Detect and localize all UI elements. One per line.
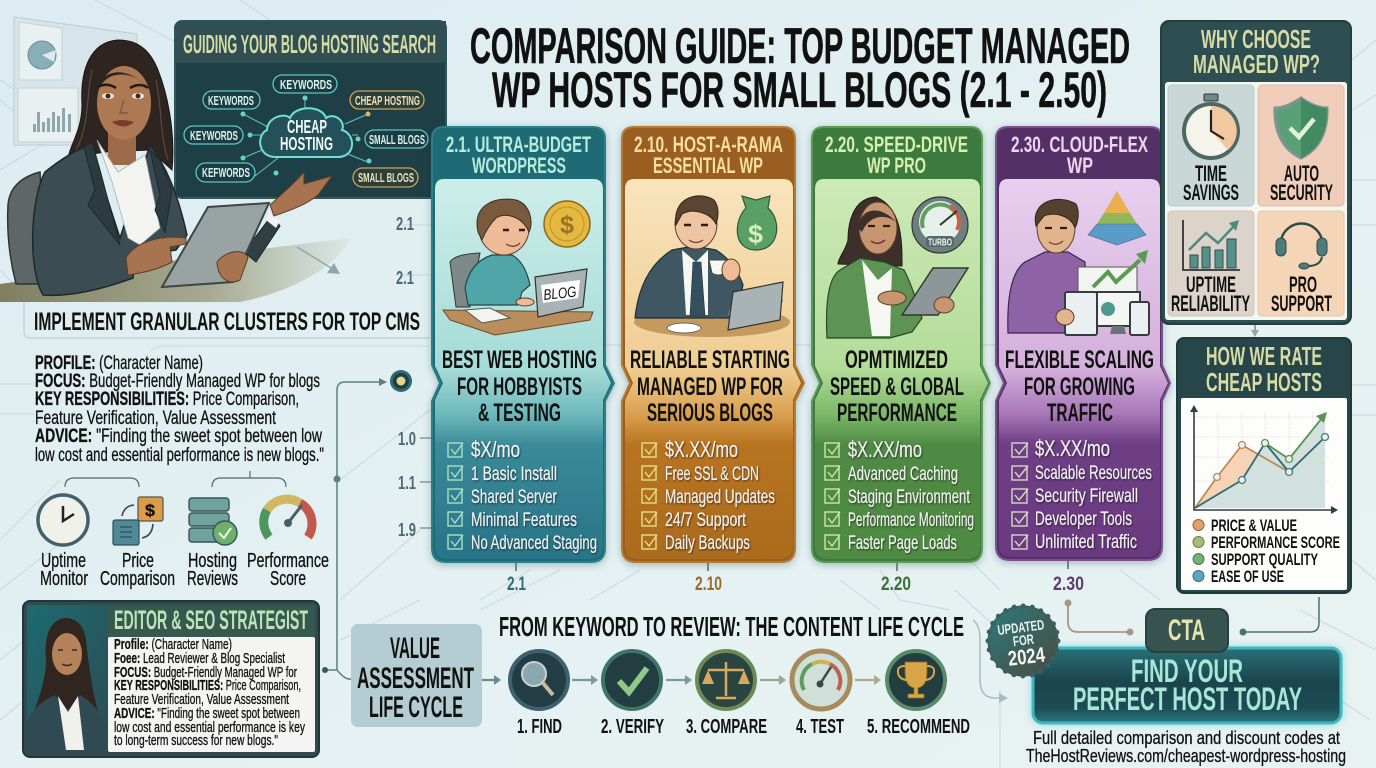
card subtitle: RELIABLE STARTING: [630, 346, 790, 374]
card title: WORDPRESS: [472, 153, 566, 178]
text block: profile: ADVICE: "Finding the sweet spot between low: [35, 426, 322, 447]
value assessment life cycle box: LIFE CYCLE: [369, 691, 463, 724]
value assessment life cycle box: ASSESSMENT: [357, 662, 474, 695]
text block: editor details: FOCUS: Budget-Friendly Managed WP for: [114, 665, 297, 681]
icon: price comparison: $: [145, 501, 156, 520]
feature list: Shared Server: [471, 487, 557, 508]
step: recommend: [867, 651, 970, 738]
icon: uptime monitor: Monitor: [40, 568, 88, 590]
badge: updated for 2024: 2024: [1007, 643, 1047, 671]
step: find: [510, 651, 568, 738]
keyword network diagram: KEYWORDS: [208, 93, 254, 108]
feature list: Performance Monitoring: [848, 510, 974, 531]
keyword network diagram: KEYWORDS: [280, 77, 332, 92]
icon: price comparison: Comparison: [100, 568, 175, 590]
text block: editor details: to long-term success for new blogs.": [114, 733, 278, 749]
tile: auto security: AUTO: [1284, 161, 1319, 186]
illustration: presenter with tablet: [0, 40, 350, 302]
feature list: Advanced Caching: [848, 464, 958, 485]
card version labels: 2.10: [695, 574, 722, 595]
tile: uptime reliability: RELIABILITY: [1171, 291, 1250, 316]
axis tick labels: 2.1: [396, 268, 414, 288]
card title: ESSENTIAL WP: [653, 153, 763, 178]
feature list: [642, 437, 775, 554]
text block: profile: PROFILE: (Character Name): [35, 353, 203, 374]
feature list: $X/mo: [471, 437, 520, 462]
feature list: Staging Environment: [848, 487, 970, 508]
feature list: Minimal Features: [471, 510, 577, 531]
arrow: why to how: [1251, 325, 1259, 337]
connectors to CTA: [973, 597, 1319, 703]
card subtitle: BEST WEB HOSTING: [442, 346, 597, 374]
icon: uptime monitor: Uptime: [41, 550, 86, 572]
card subtitle: SERIOUS BLOGS: [647, 399, 773, 427]
illustration: boy at laptop with coin: [443, 199, 593, 335]
card subtitle: & TESTING: [478, 399, 561, 427]
feature list: Free SSL & CDN: [665, 464, 759, 485]
feature list: $X.XX/mo: [848, 437, 922, 462]
heading: why choose managed wp: WHY CHOOSE: [1201, 24, 1311, 54]
step: find: 1. FIND: [517, 716, 562, 738]
portrait: editor: [27, 605, 109, 752]
text block: editor details: KEY RESPONSIBILITIES: Price Comparison,: [114, 678, 301, 694]
keyword network diagram: KEYWORDS: [190, 128, 238, 143]
illustration: woman with tablet and turbo gauge: TURBO: [928, 238, 952, 248]
feature list: 1 Basic Install: [471, 464, 557, 485]
text block: profile: Feature Verification, Value Assessment: [35, 408, 277, 429]
step: test: 4. TEST: [796, 716, 844, 738]
card title: WP PRO: [867, 153, 926, 178]
card title: [446, 132, 591, 178]
axis tick labels: 1.9: [398, 520, 416, 540]
panel: why choose managed wp: [1161, 21, 1351, 324]
keyword network diagram: [184, 75, 428, 187]
card version labels: 2.1: [507, 574, 526, 595]
title: [470, 18, 1130, 118]
card title: [634, 132, 783, 178]
panel: 2.1 ultra-budget wordpress: [432, 127, 614, 562]
CTA label: CTA: [1168, 614, 1205, 647]
axis tick labels: 1.0: [398, 429, 416, 449]
caption: implement granular clusters: IMPLEMENT GRANULAR CLUSTERS FOR TOP CMS: [34, 308, 420, 336]
connector: profile to cards: [322, 370, 412, 679]
icon: uptime monitor: [38, 495, 88, 590]
panel: 2.20 speed-drive wp pro: [812, 127, 990, 562]
caption: implement granular clusters: [24, 302, 430, 338]
tile: time savings: SAVINGS: [1183, 180, 1239, 205]
chart legend: EASE OF USE: [1211, 567, 1284, 586]
feature list: Managed Updates: [665, 487, 775, 508]
feature list: 24/7 Support: [665, 510, 747, 531]
icon: performance score: [247, 499, 329, 590]
card subtitle: [442, 346, 597, 427]
CTA label: [1146, 609, 1228, 652]
icon: price comparison: [100, 497, 175, 590]
tile: uptime reliability: [1168, 211, 1254, 316]
panel: 2.10 host-a-rama essential wp: [622, 127, 804, 562]
line chart: [1190, 405, 1338, 514]
panel: guiding your blog hosting search: GUIDING YOUR BLOG HOSTING SEARCH: [183, 29, 436, 59]
tile: uptime reliability: UPTIME: [1186, 272, 1236, 297]
illustration: man with coffee and money bag: [634, 196, 790, 337]
process: life cycle steps: [482, 651, 970, 738]
panel: guiding your blog hosting search: [175, 21, 446, 198]
text block: editor details: low cost and essential performance is key: [114, 720, 306, 736]
card subtitle: MANAGED WP FOR: [637, 373, 783, 401]
axis tick labels: 2.1: [396, 214, 414, 234]
keyword network diagram: SMALL BLOGS: [358, 170, 414, 185]
icon: hosting reviews: Reviews: [187, 568, 238, 590]
card subtitle: TRAFFIC: [1047, 399, 1113, 427]
card version labels: 2.20: [881, 574, 911, 595]
feature list: Security Firewall: [1035, 486, 1138, 507]
card version labels: [507, 561, 1084, 595]
feature list: [1012, 436, 1152, 553]
call to action button: [1033, 648, 1341, 723]
card subtitle: [630, 346, 790, 427]
feature list: Developer Tools: [1035, 509, 1132, 530]
keyword network diagram: CHEAP: [287, 117, 327, 137]
text block: editor details: Feature Verification, Value Assessment: [114, 692, 289, 708]
illustration: boy at laptop with coin: BLOG: [543, 284, 577, 304]
heading: content life cycle: FROM KEYWORD TO REVIEW: THE CONTENT LIFE CYCLE: [499, 611, 964, 642]
card title: [1011, 132, 1148, 178]
card subtitle: [1005, 346, 1154, 427]
heading: how we rate: [1206, 341, 1322, 397]
text block: editor details: ADVICE: "Finding the sweet spot between: [114, 706, 300, 722]
text block: profile: FOCUS: Budget-Friendly Managed WP for blogs: [35, 371, 320, 392]
illustration: man with devices, pyramid and growth arrow: [1008, 191, 1149, 335]
tile: auto security: [1258, 85, 1344, 206]
keyword network diagram: HOSTING: [280, 134, 333, 154]
card title: 2.1. ULTRA-BUDGET: [446, 132, 591, 157]
axis tick labels: [396, 214, 432, 540]
card subtitle: [830, 346, 964, 427]
card subtitle: PERFORMANCE: [837, 399, 957, 427]
chart legend: [1193, 516, 1340, 586]
feature list: Unlimited Traffic: [1035, 532, 1137, 553]
feature list: Scalable Resources: [1035, 463, 1152, 484]
feature list: Faster Page Loads: [848, 533, 957, 554]
panel: how we rate cheap hosts: [1177, 338, 1351, 593]
tile: pro support: [1258, 211, 1344, 316]
step: test: [792, 651, 850, 738]
card version labels: 2.30: [1053, 574, 1084, 595]
text block: profile: KEY RESPONSIBILITIES: Price Comparison,: [35, 389, 299, 410]
chart legend: PRICE & VALUE: [1211, 516, 1297, 535]
feature list: $X.XX/mo: [665, 437, 738, 462]
badge: updated for 2024: FOR: [1012, 631, 1035, 649]
text block: editor details: Profile: (Character Name): [114, 637, 232, 653]
card subtitle: FLEXIBLE SCALING: [1005, 346, 1154, 374]
card title: 2.20. SPEED-DRIVE: [825, 132, 968, 157]
feature list: $X.XX/mo: [1035, 436, 1110, 461]
badge: updated for 2024: [988, 606, 1058, 676]
feature list: [448, 437, 597, 554]
text block: profile: low cost and essential performance is new blogs.": [35, 445, 324, 466]
panel: editor and SEO strategist: EDITOR & SEO STRATEGIST: [114, 605, 308, 635]
card subtitle: SPEED & GLOBAL: [830, 373, 964, 401]
illustration: man with coffee and money bag: $: [748, 219, 764, 249]
feature list: [825, 437, 974, 554]
icon row: tools: [38, 471, 329, 590]
keyword network diagram: SMALL BLOGS: [369, 132, 425, 147]
icon: performance score: Score: [270, 568, 306, 590]
card subtitle: FOR HOBBYISTS: [457, 373, 582, 401]
tile: time savings: [1168, 85, 1254, 206]
step: compare: [686, 651, 767, 738]
keyword network diagram: CHEAP HOSTING: [355, 93, 420, 108]
panel: editor and SEO strategist: [23, 601, 319, 757]
tile: pro support: SUPPORT: [1271, 291, 1332, 316]
step: verify: [601, 651, 664, 738]
chart legend: SUPPORT QUALITY: [1211, 550, 1318, 569]
badge: updated for 2024: UPDATED: [996, 616, 1045, 638]
card subtitle: FOR GROWING: [1024, 373, 1135, 401]
background dashboard windows: [14, 17, 137, 145]
panel: 2.30 cloud-flex wp: [996, 127, 1170, 560]
tile: time savings: TIME: [1195, 161, 1227, 186]
step: recommend: 5. RECOMMEND: [867, 716, 970, 738]
step: compare: 3. COMPARE: [686, 716, 767, 738]
card title: 2.10. HOST-A-RAMA: [634, 132, 783, 157]
heading: why choose managed wp: [1193, 24, 1320, 79]
value assessment life cycle box: VALUE: [390, 632, 440, 665]
text block: profile: [35, 353, 324, 466]
text block: editor details: Foee: Lead Reviewer & Blog Specialist: [114, 651, 285, 667]
keyword network diagram: KEFWORDS: [202, 165, 250, 180]
tile: pro support: PRO: [1289, 272, 1317, 297]
card subtitle: OPMTIMIZED: [845, 346, 948, 374]
footer text: comparison link: [1026, 728, 1346, 766]
card title: [825, 132, 968, 178]
step: verify: 2. VERIFY: [601, 716, 664, 738]
illustration: woman with tablet and turbo gauge: [827, 197, 968, 338]
arrow from desk: [297, 247, 340, 274]
illustration: boy at laptop with coin: $: [560, 211, 574, 239]
value assessment life cycle box: [351, 624, 482, 727]
icon: hosting reviews: [187, 498, 238, 590]
feature list: No Advanced Staging: [471, 533, 597, 554]
card title: 2.30. CLOUD-FLEX: [1011, 132, 1148, 157]
icon: performance score: Performance: [247, 550, 329, 572]
card title: WP: [1067, 153, 1093, 178]
feature list: Daily Backups: [665, 533, 750, 554]
icon: hosting reviews: Hosting: [188, 550, 237, 572]
call to action button: FIND YOUR: [1131, 653, 1243, 689]
axis tick labels: 1.1: [398, 473, 416, 493]
text block: editor details: [114, 637, 306, 749]
icon: price comparison: Price: [122, 550, 154, 572]
